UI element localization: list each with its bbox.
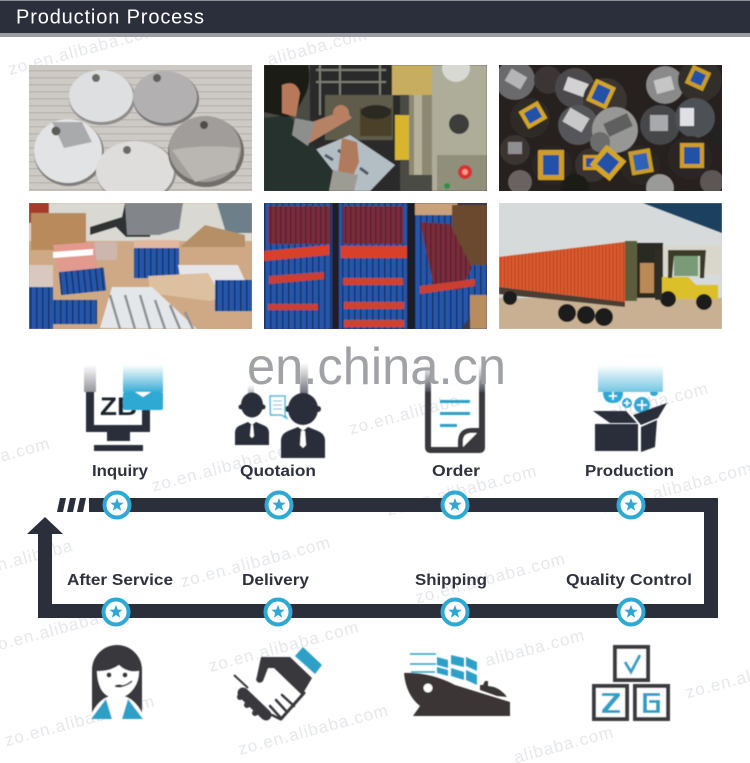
watermark texts: zo.en.alibaba.com xyxy=(6,20,161,79)
dashes at timeline start xyxy=(57,498,86,512)
timeline path xyxy=(27,498,718,618)
step labels: Delivery xyxy=(242,572,309,589)
icon: production box xyxy=(593,365,667,452)
timeline node markers xyxy=(104,492,644,624)
icon: order document xyxy=(425,365,485,453)
watermark texts: zo.en.alibaba xyxy=(347,390,462,438)
watermark texts: zo.en.alibaba.com xyxy=(385,461,539,520)
photo: pile of branded coins xyxy=(499,65,722,191)
step labels: Order xyxy=(432,463,480,480)
watermark texts: zo.en.alibaba.com xyxy=(3,692,157,750)
watermark: en.china.cn: en.china.cn xyxy=(247,338,506,396)
step labels: Shipping xyxy=(415,572,487,589)
photo: worker at press machine xyxy=(264,54,487,191)
icon: inquiry monitor: ZB xyxy=(100,393,137,421)
watermark texts: zo.en.alibaba.com xyxy=(236,700,391,759)
watermark texts: alibaba.com xyxy=(483,625,587,670)
step labels: After Service xyxy=(67,572,173,589)
watermark texts: zo.en.alibaba.com xyxy=(600,458,750,517)
icon: quotation businessmen xyxy=(235,363,325,458)
watermark texts: zo.en.alibaba.com xyxy=(413,549,568,607)
icon: delivery handshake xyxy=(234,647,322,719)
watermark texts: zo.en.alibaba.com xyxy=(207,617,361,676)
icon: shipping vessel xyxy=(404,654,510,716)
icon: quality control ZG blocks xyxy=(594,647,668,719)
header banner xyxy=(0,0,750,37)
step labels: Inquiry xyxy=(92,463,148,480)
watermark texts: alibaba.com xyxy=(607,379,711,424)
step labels: Quality Control xyxy=(566,572,692,589)
step labels: Production xyxy=(585,463,674,480)
photo: packing workers at table xyxy=(29,203,252,329)
icon: inquiry monitor xyxy=(84,365,163,451)
step labels: Quotaion xyxy=(240,463,316,480)
watermark texts: zo.en.alibaba.com xyxy=(178,533,333,591)
photo: display boxes stacked xyxy=(264,203,487,329)
watermark texts: zo.en.alibaba.com xyxy=(150,437,304,495)
watermark texts: alibaba.com xyxy=(265,24,369,69)
step labels xyxy=(67,463,692,589)
photo: blank metal discs xyxy=(29,65,252,203)
photo: container truck and forklift xyxy=(499,203,722,329)
icon: after service agent xyxy=(89,645,145,719)
title: Production Process xyxy=(16,6,204,28)
